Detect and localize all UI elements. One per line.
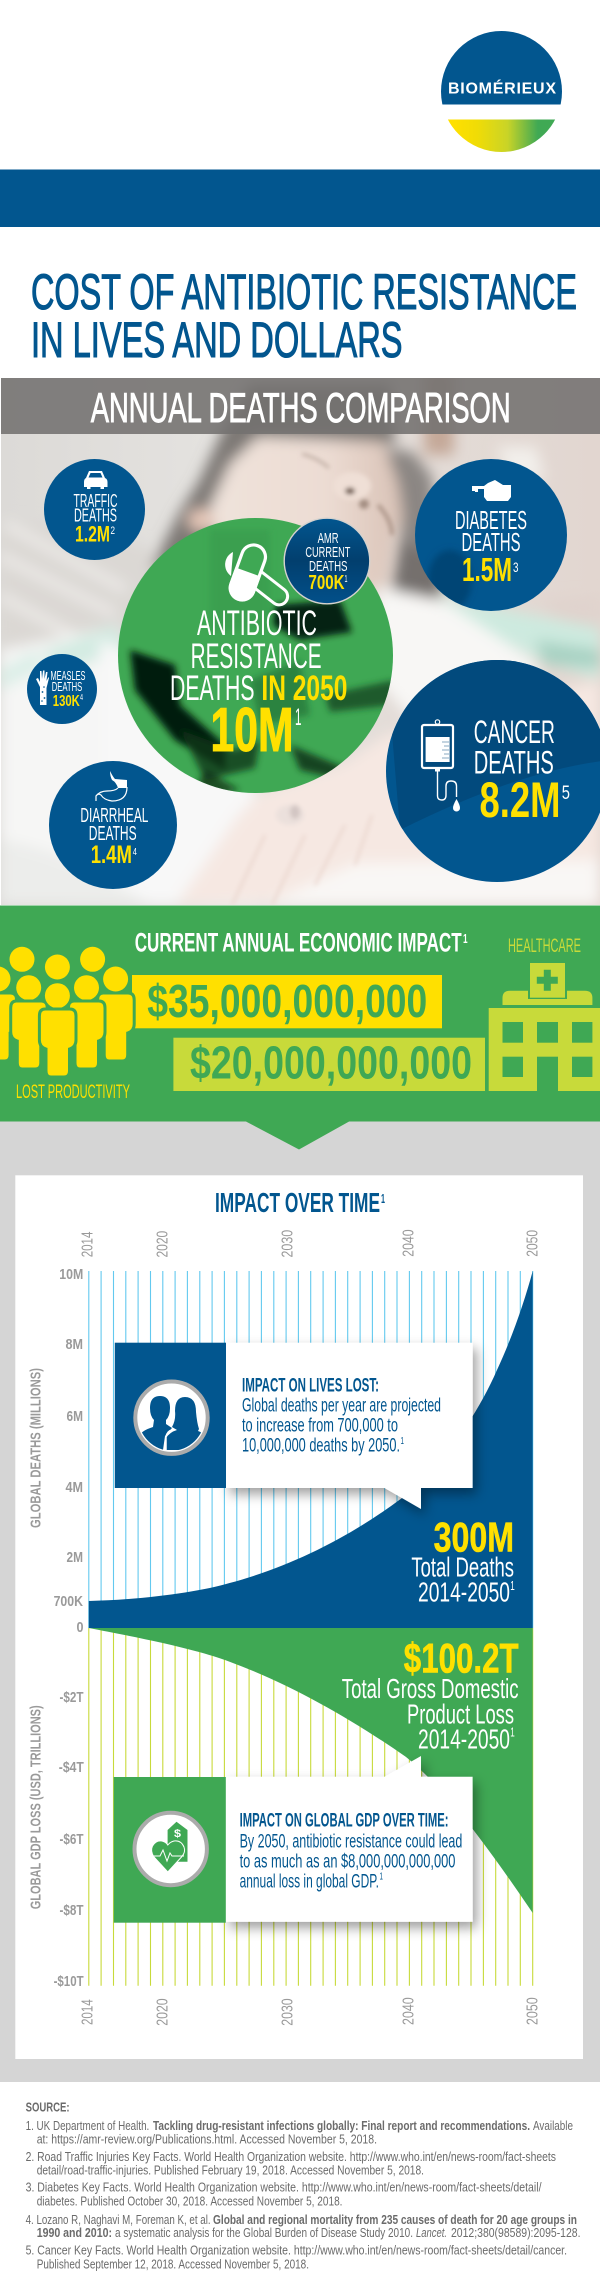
circle: diabetes deaths: 1.5M bbox=[462, 551, 512, 588]
source notes: a systematic analysis for the Global Burden of Disease Study 2010. bbox=[115, 2226, 413, 2240]
hand and arm bbox=[176, 680, 600, 905]
panel: annual deaths comparison bbox=[0, 370, 600, 905]
pill photo texture bbox=[130, 530, 395, 800]
title: IN LIVES AND DOLLARS bbox=[31, 312, 402, 368]
y axis title: global deaths: GLOBAL DEATHS (MILLIONS) bbox=[28, 1368, 44, 1528]
callout: total GDP loss stat: Product Loss bbox=[407, 1698, 514, 1729]
callout: impact on global GDP: to as much as an $8,000,000,000,000 bbox=[240, 1851, 455, 1872]
y axis labels: GDP bbox=[54, 1689, 84, 1990]
circle: diarrheal deaths bbox=[49, 761, 177, 889]
source notes bbox=[26, 2101, 581, 2272]
face bbox=[210, 437, 403, 590]
source notes: diabetes. Published October 30, 2018. Accessed November 5, 2018. bbox=[37, 2195, 342, 2209]
bottom year axis labels: 2020 bbox=[154, 1998, 172, 2026]
circle: antibiotic resistance deaths in 2050 bbox=[118, 518, 395, 800]
circle: AMR current deaths: AMR bbox=[318, 530, 339, 547]
area: GDP curve bbox=[89, 1628, 533, 1913]
source notes: 1990 and 2010: bbox=[37, 2226, 112, 2240]
icon: heart and price tag: $ bbox=[174, 1828, 181, 1840]
circle: measles deaths bbox=[27, 654, 97, 724]
callout: total deaths stat: Total Deaths bbox=[411, 1552, 514, 1583]
y axis labels: deaths: 6M bbox=[66, 1408, 83, 1425]
callout: total deaths stat: 2014-2050 bbox=[418, 1577, 510, 1608]
circle: AMR current deaths: CURRENT bbox=[305, 544, 350, 561]
circle: AMR current deaths bbox=[284, 518, 370, 604]
photo: blurred hospital patient bbox=[0, 370, 600, 905]
callout: total GDP loss stat: $100.2T bbox=[404, 1634, 519, 1681]
callout: total GDP loss stat: 1 bbox=[510, 1724, 515, 1740]
title bbox=[31, 264, 577, 368]
callout: impact on lives lost: 10,000,000 deaths by 2050. bbox=[242, 1436, 400, 1457]
logo: bioMérieux: BIOMÉRIEUX bbox=[448, 78, 556, 98]
circle: diabetes deaths: DEATHS bbox=[462, 529, 520, 557]
callout: impact on global GDP: 1 bbox=[380, 1872, 383, 1882]
panel: impact over time: 1 bbox=[381, 1191, 385, 1206]
callout: impact on global GDP: IMPACT ON GLOBAL GDP OVER TIME: bbox=[240, 1811, 448, 1832]
callout: impact on lives lost: IMPACT ON LIVES LOST: bbox=[242, 1376, 379, 1397]
icon: car bbox=[84, 471, 108, 489]
circle: antibiotic resistance deaths in 2050: ANTIBIOTIC bbox=[197, 604, 317, 643]
y axis labels: deaths: 0 bbox=[76, 1619, 84, 1636]
top year axis labels: 2020 bbox=[154, 1231, 172, 1258]
icon: people bbox=[0, 947, 134, 1077]
callout: total GDP loss stat: 2014-2050 bbox=[418, 1723, 510, 1754]
circle: AMR current deaths: 700K bbox=[308, 572, 345, 594]
hair bbox=[150, 385, 395, 570]
y axis labels: deaths: 4M bbox=[66, 1479, 83, 1496]
callout: impact on lives lost: Global deaths per year are projected bbox=[242, 1395, 441, 1416]
callout: total deaths stat bbox=[411, 1514, 515, 1608]
facial details bbox=[232, 454, 392, 905]
source notes: Available bbox=[533, 2119, 573, 2133]
panel: current annual economic impact bbox=[0, 906, 600, 1122]
icon: arm with spots bbox=[36, 670, 49, 705]
bottom year axis labels: 2040 bbox=[400, 1997, 418, 2025]
y axis title: GDP loss: GLOBAL GDP LOSS (USD, TRILLIONS) bbox=[28, 1705, 44, 1909]
callout: total deaths stat: 1 bbox=[510, 1578, 515, 1593]
circle: diarrheal deaths: DIARRHEAL bbox=[80, 805, 148, 827]
circle: AMR current deaths: DEATHS bbox=[309, 558, 348, 575]
top year axis labels: 2050 bbox=[524, 1230, 542, 1257]
arrow: economic panel pointer bbox=[245, 1121, 350, 1150]
source notes: SOURCE: bbox=[26, 2101, 70, 2115]
circle: measles deaths: MEASLES bbox=[50, 668, 86, 683]
y axis labels: deaths bbox=[54, 1266, 84, 1636]
circle: cancer deaths: 5 bbox=[562, 783, 570, 804]
bar: healthcare value: $20,000,000,000 bbox=[190, 1036, 472, 1088]
circle: traffic deaths: TRAFFIC bbox=[74, 490, 118, 511]
circle: traffic deaths: 1.2M bbox=[75, 522, 110, 546]
top year axis labels: 2014 bbox=[80, 1231, 96, 1257]
callout: total GDP loss stat bbox=[342, 1634, 519, 1754]
circle: diabetes deaths: 3 bbox=[513, 559, 519, 575]
callout: impact on global GDP bbox=[114, 1756, 473, 1923]
y axis labels: GDP: -$2T bbox=[60, 1689, 84, 1706]
y axis labels: deaths: 2M bbox=[66, 1549, 83, 1566]
y axis labels: deaths: 10M bbox=[59, 1266, 83, 1283]
icon: heart and price tag bbox=[134, 1813, 207, 1885]
circle: diabetes deaths bbox=[415, 459, 567, 611]
bottom year axis labels bbox=[80, 1997, 542, 2026]
icon: glucose dropper bbox=[472, 480, 511, 501]
y axis labels: GDP: -$4T bbox=[59, 1759, 84, 1776]
top year axis labels: 2040 bbox=[400, 1229, 418, 1257]
top year axis labels bbox=[80, 1229, 542, 1258]
circle: measles deaths: 130K bbox=[53, 693, 80, 710]
bedding bbox=[0, 625, 140, 905]
y axis labels: GDP: -$8T bbox=[60, 1902, 84, 1919]
icon: hospital bbox=[489, 961, 600, 1091]
source notes: Published September 12, 2018. Accessed November 5, 2018. bbox=[37, 2258, 309, 2272]
panel: impact over time bbox=[15, 1175, 583, 2059]
icon: pills bbox=[225, 541, 291, 608]
source notes: 1. UK Department of Health. bbox=[26, 2119, 149, 2133]
circle: antibiotic resistance deaths in 2050: RESISTANCE bbox=[191, 637, 322, 676]
circle: diabetes deaths: DIABETES bbox=[455, 507, 527, 535]
bottom year axis labels: 2014 bbox=[80, 1999, 96, 2025]
source notes: at: https://amr-review.org/Publications.html. Accessed November 5, 2018. bbox=[37, 2132, 377, 2146]
circle: traffic deaths: 2 bbox=[110, 525, 115, 537]
circle: diarrheal deaths: DEATHS bbox=[89, 823, 137, 845]
source notes: detail/road-traffic-injuries. Published February 19, 2018. Accessed November 5, 2018. bbox=[37, 2164, 424, 2178]
bottom year axis labels: 2030 bbox=[280, 1998, 296, 2026]
label: lost productivity: LOST PRODUCTIVITY bbox=[16, 1082, 130, 1103]
source notes: 4. Lozano R, Naghavi M, Foreman K, et al. bbox=[26, 2213, 211, 2227]
chart: GDP loss bbox=[89, 1628, 533, 1986]
circle: cancer deaths: DEATHS bbox=[474, 745, 554, 781]
heading: impact over time: IMPACT OVER TIME bbox=[215, 1187, 380, 1218]
panel: current annual economic impact: 1 bbox=[463, 931, 468, 946]
circle: antibiotic resistance deaths in 2050: 10M bbox=[210, 696, 294, 765]
y axis labels: GDP: -$6T bbox=[60, 1831, 84, 1848]
bar: lost productivity value: $35,000,000,000 bbox=[147, 975, 427, 1027]
source notes: Lancet. bbox=[416, 2226, 447, 2240]
bottom year axis labels: 2050 bbox=[524, 1997, 542, 2025]
circle: cancer deaths bbox=[386, 660, 600, 882]
circle: AMR current deaths: 1 bbox=[344, 574, 348, 585]
circle: diarrheal deaths: 1.4M bbox=[91, 841, 132, 869]
logo: bioMérieux bbox=[441, 31, 562, 152]
header band bbox=[1, 378, 600, 434]
callout: total deaths stat: 300M bbox=[434, 1514, 514, 1561]
callout: impact on lives lost bbox=[115, 1343, 473, 1509]
icon: stomach bbox=[96, 771, 127, 801]
left pillow bbox=[0, 520, 170, 680]
circle: measles deaths: 4 bbox=[80, 693, 83, 702]
icon: IV bag bbox=[422, 720, 460, 812]
y axis labels: GDP: -$10T bbox=[54, 1973, 84, 1990]
y axis labels: deaths: 8M bbox=[66, 1336, 83, 1353]
circle: diarrheal deaths: 4 bbox=[133, 847, 137, 858]
callout: impact on global GDP: annual loss in global GDP. bbox=[240, 1871, 379, 1892]
callout: total GDP loss stat: Total Gross Domestic bbox=[342, 1673, 519, 1704]
grey background behind chart bbox=[0, 1122, 600, 2082]
icon: people silhouettes bbox=[135, 1382, 208, 1454]
callout: impact on lives lost: to increase from 700,000 to bbox=[242, 1416, 398, 1437]
area: deaths curve bbox=[89, 1271, 533, 1628]
circle: antibiotic resistance deaths in 2050: IN 2050 bbox=[261, 669, 347, 708]
circle: antibiotic resistance deaths in 2050: 1 bbox=[295, 704, 302, 731]
callout: impact on lives lost: 1 bbox=[400, 1436, 404, 1447]
circle: traffic deaths bbox=[44, 459, 145, 560]
chart: global deaths bbox=[89, 1271, 533, 1628]
top year axis labels: 2030 bbox=[280, 1229, 296, 1258]
circle: measles deaths: DEATHS bbox=[52, 679, 82, 694]
top blue band bbox=[0, 170, 600, 227]
y axis labels: deaths: 700K bbox=[54, 1593, 83, 1610]
circle: antibiotic resistance deaths in 2050: DEATHS bbox=[170, 669, 254, 708]
circle: cancer deaths: 8.2M bbox=[480, 772, 560, 828]
callout: impact on global GDP: By 2050, antibiotic resistance could lead bbox=[240, 1831, 462, 1852]
circle: traffic deaths: DEATHS bbox=[74, 504, 117, 526]
